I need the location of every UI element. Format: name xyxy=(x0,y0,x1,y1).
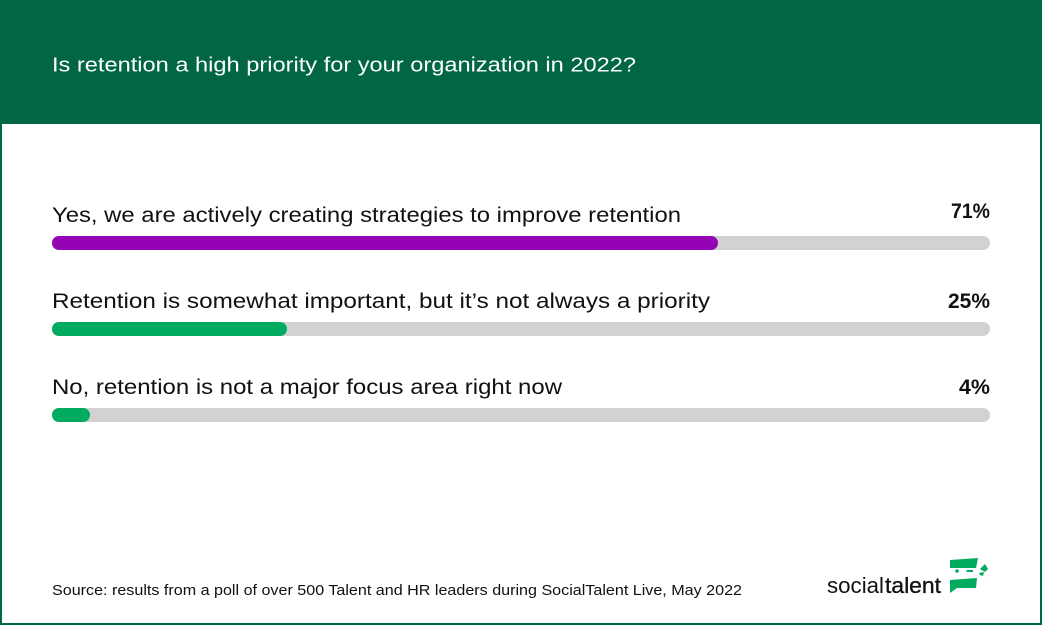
header band xyxy=(0,0,1042,124)
source note: Source: results from a poll of over 500 Talent and HR leaders during SocialTalent Live, May 2022 xyxy=(52,582,742,599)
row 2 bar fill xyxy=(52,322,287,336)
row 3 bar track xyxy=(52,408,990,422)
row 1 value: 71% xyxy=(951,200,990,223)
row 1 label: Yes, we are actively creating strategies to improve retention xyxy=(52,204,681,227)
logo icon xyxy=(950,558,988,593)
row 1 bar track xyxy=(52,236,990,250)
row 3 label: No, retention is not a major focus area right now xyxy=(52,376,563,399)
logo wordmark: social xyxy=(827,573,884,598)
row 3 bar fill xyxy=(52,408,90,422)
row 2 label: Retention is somewhat important, but it’s not always a priority xyxy=(52,290,711,313)
row 1 bar fill xyxy=(52,236,718,250)
row 3 value: 4% xyxy=(959,376,990,399)
poll row: yes, 71% xyxy=(52,200,990,250)
poll row: somewhat, 25% xyxy=(52,290,990,336)
logo wordmark: talent xyxy=(885,573,941,598)
row 2 value: 25% xyxy=(948,290,990,313)
poll row: no, 4% xyxy=(52,376,990,422)
logo: socialtalent xyxy=(827,558,988,598)
title: Is retention a high priority for your organization in 2022? xyxy=(52,54,636,76)
row 2 bar track xyxy=(52,322,990,336)
